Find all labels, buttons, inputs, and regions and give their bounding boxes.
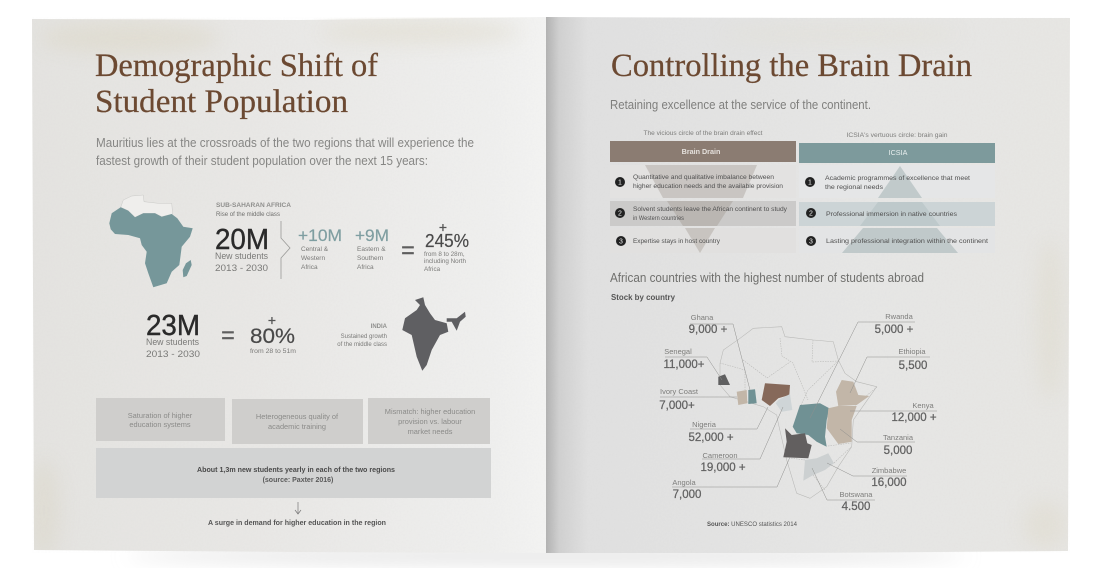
label: Rwanda bbox=[875, 312, 914, 336]
heading: India: of the middle class bbox=[337, 342, 387, 348]
heading: India bbox=[337, 324, 388, 348]
label: Ethiopia: 5,500 bbox=[899, 360, 927, 372]
panel: ICSIA table: ICSIA's vertuous circle: brain gain bbox=[846, 133, 948, 139]
chart: Africa student map bbox=[659, 312, 937, 513]
stat: 20M new students: 2013 - 2030 bbox=[215, 263, 268, 274]
label: Kenya: 12,000 + bbox=[891, 412, 937, 424]
label: Tanzania bbox=[883, 433, 914, 457]
heading: Sub-Saharan Africa: SUB-SAHARAN AFRICA bbox=[216, 202, 291, 209]
panel: ICSIA table bbox=[799, 133, 995, 253]
panel: brain drain table: Brain Drain bbox=[682, 147, 720, 156]
intro paragraph: fastest growth of their student population over the next 15 years: bbox=[96, 153, 428, 168]
label: Senegal bbox=[663, 347, 705, 371]
panel: new students per year bbox=[96, 448, 491, 498]
icon: upward triangle bbox=[842, 166, 958, 253]
icon: Africa map bbox=[109, 195, 193, 287]
number badges bbox=[615, 177, 626, 246]
title: left page bbox=[95, 48, 378, 120]
country: DR Congo bbox=[793, 403, 829, 447]
label: Nigeria: 52,000 + bbox=[688, 432, 734, 444]
label: Ivory Coast: Ivory Coast bbox=[660, 387, 699, 396]
stat: 23M new students: New students bbox=[146, 337, 199, 348]
title: left page: Demographic Shift of bbox=[95, 48, 378, 84]
country: Cameroon bbox=[776, 394, 792, 412]
stat: 20M new students bbox=[215, 224, 269, 274]
title: left page: Student Population bbox=[95, 84, 348, 120]
stat: +245%: including North bbox=[424, 258, 467, 265]
number badges: 2 bbox=[618, 210, 622, 218]
stat: +10M Central and Western Africa bbox=[298, 226, 342, 271]
stat: +10M Central and Western Africa: Western bbox=[301, 255, 325, 262]
number badges: 1 bbox=[618, 180, 622, 186]
label: Nigeria: Nigeria bbox=[692, 420, 717, 429]
label: Zimbabwe: Zimbabwe bbox=[872, 466, 906, 475]
label: Ivory Coast bbox=[659, 387, 699, 412]
panel: brain drain table: Solvent students leave the African continent to study bbox=[633, 206, 788, 213]
country: Angola bbox=[783, 428, 812, 458]
arrow bbox=[295, 502, 301, 514]
label: Senegal: 11,000+ bbox=[663, 359, 705, 371]
stat: +9M Eastern and Southern Africa: +9M bbox=[355, 226, 389, 245]
stat: 20M new students: New students bbox=[215, 251, 268, 262]
heading: students abroad: African countries with the highest number of students abroad bbox=[610, 271, 924, 285]
country: Ivory Coast bbox=[737, 390, 747, 405]
panel: brain drain table: Expertise stays in host country bbox=[633, 238, 721, 245]
stat: +10M Central and Western Africa: +10M bbox=[298, 226, 342, 245]
stat: +10M Central and Western Africa: Central & bbox=[301, 246, 329, 253]
stat: +245%: from 8 to 28m, bbox=[424, 251, 465, 258]
panel: brain drain table: higher education needs and the available provision bbox=[633, 183, 783, 190]
heading: Sub-Saharan Africa: Rise of the middle class bbox=[216, 212, 280, 218]
stat: +9M Eastern and Southern Africa bbox=[355, 226, 389, 271]
number badges bbox=[805, 177, 816, 246]
label: Cameroon bbox=[700, 451, 746, 474]
label: Botswana: Botswana bbox=[840, 490, 873, 499]
panel: new students per year: (source: Paxter 2016) bbox=[263, 477, 333, 484]
stat: +80%: 80% bbox=[250, 325, 295, 348]
panel: heterogeneous quality box: academic training bbox=[268, 422, 326, 431]
number badges: 2 bbox=[809, 210, 813, 218]
source note: Source: UNESCO statistics 2014 bbox=[707, 522, 798, 528]
label: Ghana: 9,000 + bbox=[689, 324, 728, 336]
icon: downward triangle bbox=[645, 165, 757, 253]
stat: +9M Eastern and Southern Africa: Africa bbox=[357, 264, 374, 271]
page shadow bbox=[126, 550, 966, 562]
label: Ethiopia: Ethiopia bbox=[898, 347, 926, 356]
panel: saturation box bbox=[96, 398, 225, 441]
stat: 23M new students: 2013 - 2030 bbox=[146, 349, 200, 360]
subtitle: Retaining excellence at the service of the continent. bbox=[610, 98, 871, 112]
heading: Sub-Saharan Africa bbox=[216, 202, 291, 218]
country: Kenya and Tanzania bbox=[827, 406, 857, 444]
label: Tanzania: Tanzania bbox=[883, 433, 914, 442]
label: Kenya bbox=[891, 401, 937, 424]
stat: +245%: 245% bbox=[425, 231, 469, 251]
label: Rwanda: 5,000 + bbox=[875, 324, 914, 336]
panel: ICSIA table: the regional needs bbox=[825, 184, 884, 191]
country: Nigeria bbox=[762, 383, 790, 406]
panel: ICSIA table: Academic programmes of excellence that meet bbox=[825, 175, 970, 182]
label: Zimbabwe: 16,000 bbox=[871, 477, 907, 489]
stat: +245%: + bbox=[439, 219, 447, 235]
label: Tanzania: 5,000 bbox=[884, 445, 912, 457]
label: Ivory Coast: 7,000+ bbox=[659, 400, 695, 412]
label: Ethiopia bbox=[898, 347, 927, 372]
panel: saturation box: education systems bbox=[129, 420, 191, 429]
stat: +80%: + bbox=[268, 312, 276, 328]
intro paragraph bbox=[96, 135, 474, 168]
panel: heterogeneous quality box: Heterogeneous quality of bbox=[256, 412, 339, 421]
label: Botswana: 4.500 bbox=[842, 501, 870, 513]
country: Ethiopia bbox=[836, 380, 869, 406]
label: Nigeria bbox=[688, 420, 734, 444]
panel: ICSIA table: ICSIA bbox=[889, 148, 908, 157]
stat: 23M new students bbox=[146, 310, 200, 360]
panel: brain drain table: The vicious circle of the brain drain effect bbox=[644, 131, 763, 137]
panel: mismatch box: Mismatch: higher education bbox=[385, 407, 475, 416]
panel: brain drain table bbox=[610, 131, 796, 253]
label: Angola: Angola bbox=[672, 478, 697, 487]
panel: mismatch box: market needs bbox=[408, 427, 453, 436]
panel: heterogeneous quality box bbox=[232, 399, 363, 444]
label: Senegal: Senegal bbox=[664, 347, 692, 356]
stat: +245% bbox=[424, 219, 469, 273]
panel: right page bbox=[546, 17, 1070, 553]
number badges: 1 bbox=[808, 180, 812, 186]
panel: left page bbox=[32, 17, 546, 553]
equals sign: = bbox=[401, 237, 415, 263]
map outline bbox=[720, 327, 877, 498]
panel: brain drain table: in Western countries bbox=[633, 215, 684, 222]
panel: mismatch box: provision vs. labour bbox=[398, 417, 462, 426]
panel: saturation box: Saturation of higher bbox=[128, 411, 193, 420]
intro paragraph: Mauritius lies at the crossroads of the two regions that will experience the bbox=[96, 135, 474, 150]
label: Ghana: Ghana bbox=[691, 313, 714, 322]
panel: mismatch box bbox=[368, 398, 490, 444]
panel: brain drain table: Quantitative and qualitative imbalance between bbox=[633, 174, 774, 181]
label: Cameroon: 19,000 + bbox=[700, 462, 746, 474]
label: Ghana bbox=[689, 313, 728, 336]
number badges: 3 bbox=[809, 238, 813, 246]
country: Zimbabwe and Botswana bbox=[803, 453, 834, 481]
stat: +80% bbox=[250, 312, 296, 355]
label: Zimbabwe bbox=[871, 466, 907, 489]
stat: +9M Eastern and Southern Africa: Southern bbox=[357, 255, 384, 262]
label: Cameroon: Cameroon bbox=[702, 451, 738, 460]
label: Angola: 7,000 bbox=[673, 489, 701, 501]
equals sign: = bbox=[221, 322, 235, 348]
stat: +10M Central and Western Africa: Africa bbox=[301, 264, 318, 271]
panel: new students per year: About 1,3m new students yearly in each of the two regions bbox=[197, 467, 395, 474]
leader lines bbox=[660, 322, 937, 500]
icon: India map bbox=[402, 297, 466, 371]
label: Kenya: Kenya bbox=[912, 401, 934, 410]
stat: +245%: Africa bbox=[424, 266, 441, 273]
panel: ICSIA table: Professional immersion in native countries bbox=[826, 211, 958, 218]
country: Ghana bbox=[748, 389, 757, 404]
label: Botswana bbox=[840, 490, 873, 513]
stat: +80%: from 28 to 51m bbox=[250, 348, 296, 355]
stat: 20M new students: 20M bbox=[215, 224, 269, 256]
text: surge in demand: A surge in demand for higher education in the region bbox=[208, 520, 386, 527]
label: Angola bbox=[672, 478, 701, 501]
number badges: 3 bbox=[619, 238, 623, 246]
panel: ICSIA table: Lasting professional integration within the continent bbox=[826, 238, 988, 245]
stat: 23M new students: 23M bbox=[146, 310, 200, 342]
country: Senegal bbox=[718, 374, 730, 385]
stat: +9M Eastern and Southern Africa: Eastern & bbox=[357, 246, 386, 253]
heading: India: INDIA bbox=[371, 324, 388, 330]
heading: India: Sustained growth bbox=[341, 334, 387, 340]
title: right page: Controlling the Brain Drain bbox=[611, 48, 972, 84]
subheading: stock by country: Stock by country bbox=[611, 293, 676, 302]
label: Rwanda: Rwanda bbox=[885, 312, 914, 321]
bracket bbox=[281, 221, 290, 279]
